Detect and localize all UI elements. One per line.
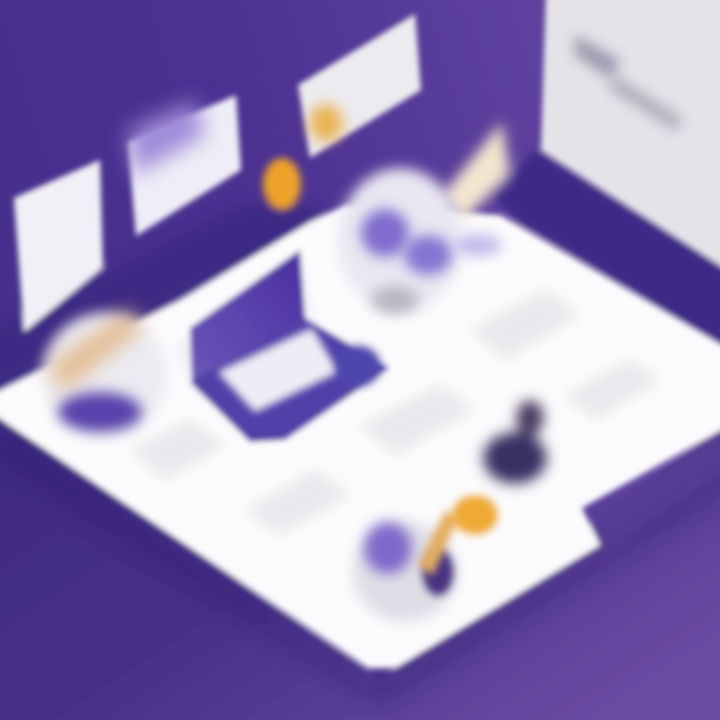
person figure	[483, 400, 547, 484]
floor platform	[0, 205, 720, 668]
lower background area	[0, 400, 720, 720]
floating panel middle	[128, 95, 241, 236]
floor text cards	[130, 290, 660, 535]
orange connector nodes	[263, 104, 343, 210]
back wall panel	[541, 0, 720, 272]
dark band behind floor	[0, 205, 330, 400]
floating panel right	[298, 14, 421, 158]
left donut chart	[43, 310, 167, 437]
floor shadow	[0, 430, 720, 705]
bottom chart group	[353, 495, 498, 622]
rocket shape	[442, 122, 510, 222]
wall text lines	[575, 35, 620, 80]
pie chart with purple shapes	[338, 168, 502, 314]
dark band right of floor	[490, 150, 720, 350]
laptop	[178, 250, 390, 442]
floating panel left	[14, 160, 103, 332]
